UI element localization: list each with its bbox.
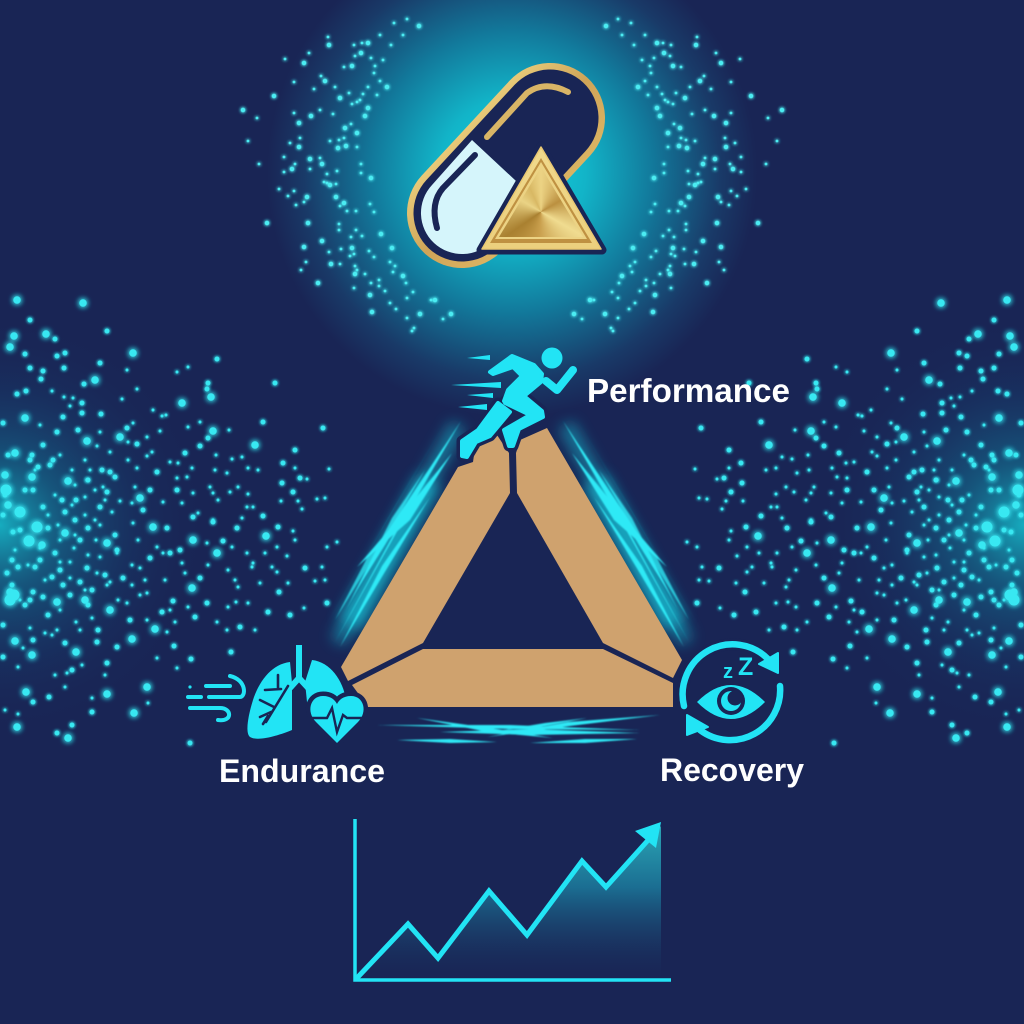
pill capsule with gold rim — [421, 86, 568, 254]
energy streaks: below triangle — [377, 715, 660, 743]
energy streaks: right of triangle — [563, 420, 701, 647]
particles: left field — [3, 300, 337, 743]
label: Endurance: Endurance — [219, 753, 385, 789]
particle edge glow left — [0, 300, 215, 750]
particle edge glow right — [809, 300, 1024, 750]
icon: running figure — [451, 348, 573, 457]
triangle: three tan segments — [341, 428, 682, 707]
icon: recovery eye with cycle arrows and zZ — [683, 644, 780, 740]
label: Performance: Performance — [587, 372, 790, 409]
segment: right side — [516, 428, 682, 678]
particles: upper right cloud — [574, 19, 782, 331]
background glow behind pill — [267, 0, 757, 417]
particles: right field — [687, 300, 1021, 743]
chart: rising line with area and axes — [355, 819, 671, 980]
energy streaks: left of triangle — [323, 420, 461, 647]
segment: left side — [341, 435, 510, 681]
icon: lungs with heart and wind — [188, 645, 364, 743]
gold triangle brushed metal centre — [499, 175, 582, 237]
particles: upper left cloud — [243, 19, 451, 331]
label: Recovery: Recovery — [660, 752, 804, 788]
segment: bottom side — [352, 649, 673, 707]
gold triangle frame — [481, 146, 602, 250]
zZ sleep letters: z — [723, 661, 733, 683]
big Z of sleep mark: Z — [738, 653, 753, 681]
